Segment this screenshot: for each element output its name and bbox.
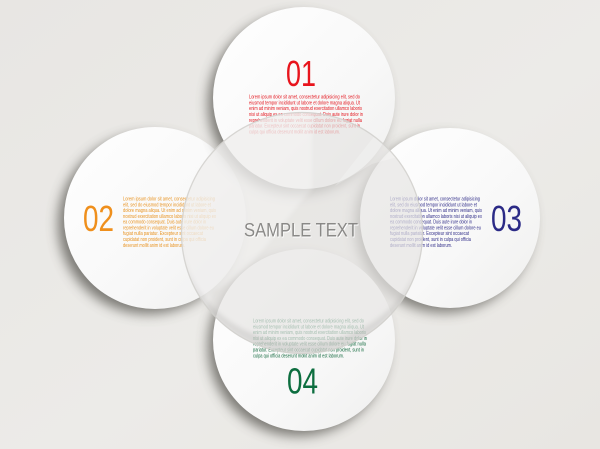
text 03: reprehenderit in voluptate velit esse cillum dolore eu [390,225,481,231]
glass circle: SAMPLE TEXT [244,220,358,242]
text 04: Lorem ipsum dolor sit amet, consectetur adipisicing elit, sed do [253,318,364,324]
text 03: fugiat nulla pariatur. Excepteur sint occaecat [390,231,469,237]
text 03 [390,196,482,249]
text 04: reprehenderit in voluptate velit esse cillum dolore eu fugiat nulla [253,342,366,348]
text 04: pariatur. Excepteur sint occaecat cupidatat non proident, sunt in [253,348,364,354]
disc 1 [208,7,395,194]
text 01: pariatur. Excepteur sint occaecat cupidatat non proident, sunt in [249,124,360,130]
text 03: nostrud exercitation ullamco laboris nisi ut aliquip ex [390,214,482,220]
text 04 [253,318,367,359]
number 04: 04 [287,360,318,402]
text 02: ea commodo consequat. Duis aute irure dolor in [123,220,206,226]
text 02: dolore magna aliqua. Ut enim ad minim veniam, quis [123,208,216,214]
text 03: cupidatat non proident, sunt in culpa qui officia [390,237,471,243]
text 03: Lorem ipsum dolor sit amet, consectetur adipisicing [390,196,480,202]
text 01: nisi ut aliquip ex ea commodo consequat. Duis aute irure dolor in [249,112,363,118]
text 02: elit, sed do eiusmod tempor incididunt ut labore et [123,202,211,208]
number 03: 03 [491,198,522,239]
glass circle [170,110,423,354]
text 03: deserunt mollit anim id est laborum. [390,243,452,249]
number 02: 02 [83,198,114,239]
text 02: reprehenderit in voluptate velit esse cillum dolore eu [123,225,214,231]
text 02: fugiat nulla pariatur. Excepteur sint occaecat [123,231,203,237]
text 02: deserunt mollit anim id est laborum. [123,243,185,249]
text 01: culpa qui officia deserunt mollit anim id est laborum. [249,129,340,135]
center title: SAMPLE TEXT [245,220,359,242]
text 01: reprehenderit in voluptate velit esse cillum dolore eu fugiat nulla [249,118,362,124]
disc 2 [58,127,246,314]
disc 4 [208,249,395,436]
text 02: Lorem ipsum dolor sit amet, consectetur adipisicing [123,196,215,202]
text 01: eiusmod tempor incididunt ut labore et dolore magna aliqua. Ut [249,100,360,106]
text 03: ea commodo consequat. Duis aute irure dolor in [390,220,472,226]
text 04: eiusmod tempor incididunt ut labore et dolore magna aliqua. Ut [253,324,364,330]
text 04: enim ad minim veniam, quis nostrud exercitation ullamco laboris [253,330,366,336]
text 03: dolore magna aliqua. Ut enim ad minim veniam, quis [390,208,482,214]
text 04: culpa qui officia deserunt mollit anim id est laborum. [253,353,344,359]
text 02: nostrud exercitation ullamco laboris nisi ut aliquip ex [123,214,216,220]
text 01 [249,95,363,135]
text 02 [123,196,216,249]
number 01: 01 [286,53,316,94]
text 04: nisi ut aliquip ex ea commodo consequat. Duis aute irure dolor in [253,336,367,342]
text 01: Lorem ipsum dolor sit amet, consectetur adipisicing elit, sed do [249,95,360,101]
text 01: enim ad minim veniam, quis nostrud exercitation ullamco laboris [249,106,362,112]
text 03: elit, sed do eiusmod tempor incididunt ut labore et [390,202,477,208]
disc 3 [355,128,540,313]
text 02: cupidatat non proident, sunt in culpa qui officia [123,237,206,243]
